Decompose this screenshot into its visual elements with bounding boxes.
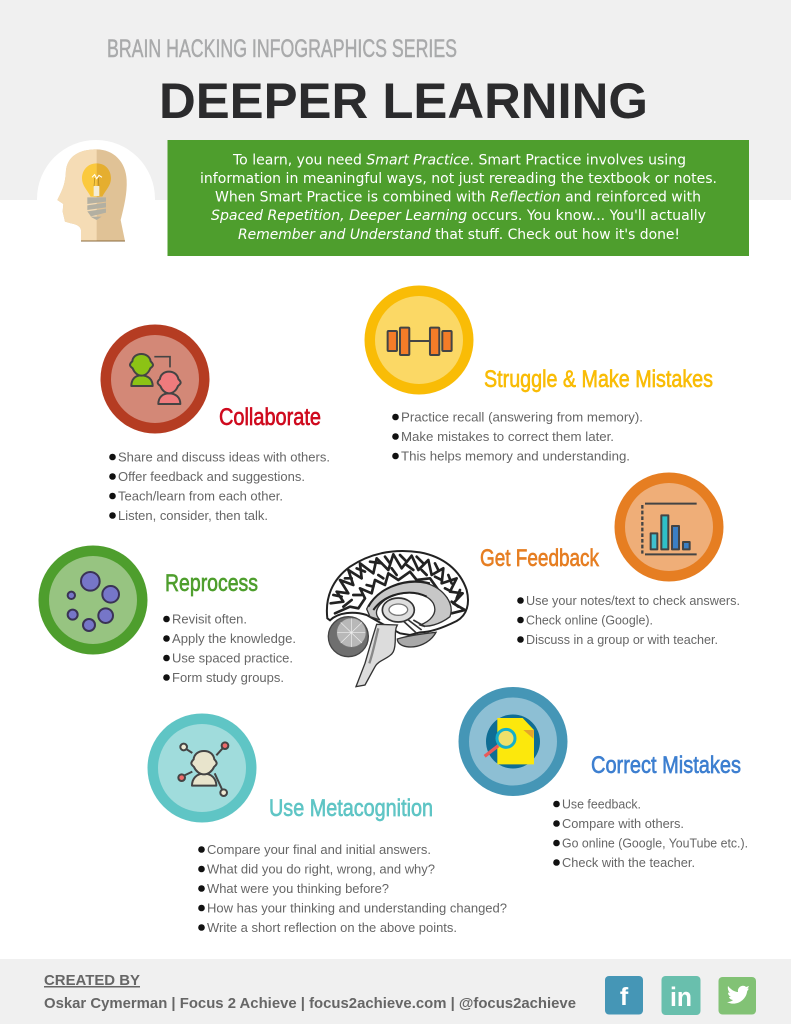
bullet list [109, 450, 330, 523]
credit heading: CREATED BY [44, 972, 140, 989]
section: Reprocess [38, 546, 296, 685]
header band [0, 0, 791, 200]
bullet list [163, 612, 296, 685]
icon: facebook [605, 976, 643, 1014]
icon: head with light bulb [37, 140, 155, 258]
bullet list [392, 410, 643, 464]
section: Collaborate [100, 324, 330, 523]
illustration: brain cross-section [327, 551, 468, 687]
intro panel: information in meaningful ways, not just rereading the textbook or notes. [200, 171, 717, 187]
heading: Struggle & Make Mistakes [484, 366, 713, 393]
bullet list: Practice recall (answering from memory). [401, 410, 643, 424]
icon: twitter [718, 977, 756, 1014]
intro panel: When Smart Practice is combined with Reflection and reinforced with [215, 190, 701, 206]
bullet list: Go online (Google, YouTube etc.). [562, 836, 748, 850]
bullet list [198, 842, 507, 935]
section: Struggle & Make Mistakes [364, 286, 713, 464]
title: DEEPER LEARNING [159, 73, 648, 129]
section: Get Feedback [480, 472, 740, 647]
bullet list: Listen, consider, then talk. [118, 508, 268, 523]
bullet list: Discuss in a group or with teacher. [526, 632, 718, 647]
icon: two people [100, 324, 210, 434]
intro panel [168, 140, 749, 256]
bullet list: Use feedback. [562, 796, 641, 812]
bullet list [553, 796, 748, 870]
bullet list: Compare with others. [562, 816, 684, 831]
icon: person with nodes [148, 714, 256, 822]
icon: circles [38, 546, 148, 654]
series heading: BRAIN HACKING INFOGRAPHICS SERIES [107, 35, 457, 63]
bullet list: Revisit often. [172, 612, 247, 626]
section: Correct Mistakes [458, 687, 748, 870]
heading: Use Metacognition [269, 795, 433, 822]
heading: Get Feedback [480, 545, 600, 572]
section: Use Metacognition [148, 714, 507, 935]
bullet list: Use your notes/text to check answers. [526, 593, 740, 608]
bullet list: How has your thinking and understanding changed? [207, 900, 507, 916]
icon: dumbbell [364, 286, 474, 394]
bullet list: Write a short reflection on the above points. [207, 920, 457, 935]
bullet list: Offer feedback and suggestions. [118, 469, 305, 484]
icon: facebook: f [620, 983, 629, 1011]
heading: Collaborate [219, 404, 321, 431]
icon: document and magnifier [458, 687, 568, 796]
heading: Reprocess [165, 570, 258, 597]
bullet list: Form study groups. [172, 670, 284, 685]
bullet list: Teach/learn from each other. [118, 488, 283, 504]
bullet list: This helps memory and understanding. [401, 448, 630, 464]
bullet list: Use spaced practice. [172, 650, 293, 666]
bullet list: Share and discuss ideas with others. [118, 450, 330, 464]
bullet list [517, 593, 740, 647]
bullet list: What did you do right, wrong, and why? [207, 862, 435, 876]
bullet list: Apply the knowledge. [172, 631, 296, 646]
heading: Correct Mistakes [591, 752, 741, 779]
bullet list: Check online (Google). [526, 612, 653, 628]
icon: linkedin [662, 976, 700, 1015]
intro panel: Spaced Repetition, Deeper Learning occurs. You know... You'll actually [211, 208, 706, 224]
intro panel: To learn, you need Smart Practice. Smart Practice involves using [232, 152, 686, 168]
bullet list: Make mistakes to correct them later. [401, 429, 614, 444]
bullet list: Check with the teacher. [562, 855, 695, 870]
intro panel: Remember and Understand that stuff. Check out how it's done! [238, 227, 680, 243]
bullet list: What were you thinking before? [207, 881, 389, 896]
footer band [0, 959, 791, 1024]
icon: bar chart [614, 472, 724, 582]
icon: linkedin: in [670, 982, 692, 1012]
credit line: Oskar Cymerman | Focus 2 Achieve | focus2achieve.com | @focus2achieve [44, 995, 576, 1012]
bullet list: Compare your final and initial answers. [207, 842, 431, 857]
